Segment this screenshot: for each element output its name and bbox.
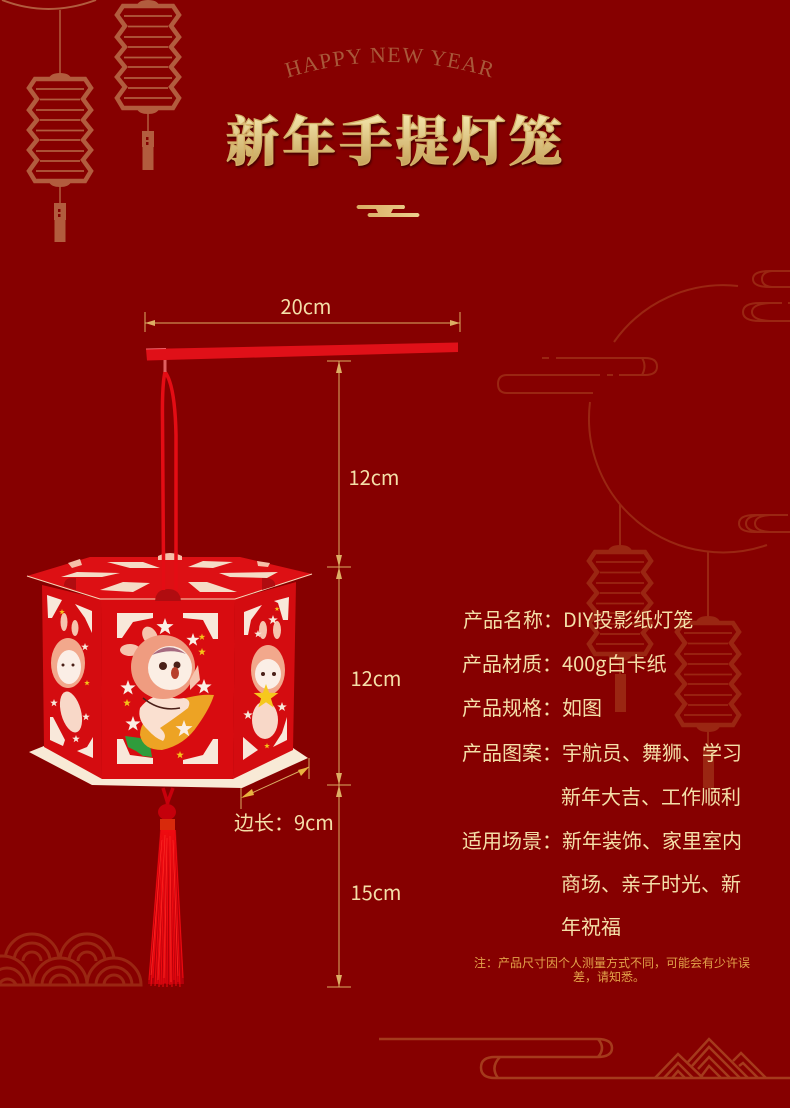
dimension: height column: 12cm — [349, 462, 399, 491]
dimension: side length 9cm — [234, 758, 334, 836]
decoration: bottom right clouds and mountains — [379, 1039, 790, 1078]
lantern top face — [27, 552, 312, 601]
dimension: width 20cm: 20cm — [281, 291, 331, 320]
dimension: side length 9cm: 边长：9cm — [234, 807, 334, 836]
footnote: 注：产品尺寸因个人测量方式不同，可能会有少许误 — [474, 954, 750, 971]
lantern ribbon loop — [162, 372, 176, 566]
footnote: 差，请知悉。 — [573, 968, 645, 985]
paper lantern body — [27, 552, 312, 788]
product specification list: 产品名称：DIY投影纸灯笼 — [463, 604, 693, 633]
product specification list: 产品规格：如图 — [462, 692, 602, 721]
dimension: width 20cm — [145, 291, 460, 332]
dimension: height column — [327, 361, 401, 987]
title ornament — [356, 205, 420, 217]
product specification list: 产品材质：400g白卡纸 — [462, 648, 667, 677]
subtitle: happy new year: HAPPY NEW YEAR — [284, 48, 492, 78]
product specification list: 适用场景：新年装饰、家里室内 — [462, 825, 742, 854]
lantern base — [29, 746, 308, 788]
front face — [101, 599, 235, 779]
right face — [233, 582, 296, 779]
lantern tassel — [148, 788, 184, 987]
product specification list: 商场、亲子时光、新 — [561, 868, 741, 897]
dimension: height column: 12cm — [351, 663, 401, 692]
decoration: top left hanging lanterns — [2, 0, 179, 242]
lantern handle stick — [146, 342, 458, 372]
product specification list: 新年大吉、工作顺利 — [561, 781, 741, 810]
decoration: bottom left wave scallops — [0, 934, 141, 985]
product specification list — [462, 604, 742, 940]
footnote — [474, 954, 750, 985]
title: 新年手提灯笼 — [226, 113, 562, 172]
decoration: right circle, clouds and faint lanterns — [498, 271, 790, 788]
rabbit astronaut on carrot — [120, 618, 214, 758]
left face — [42, 585, 102, 779]
product specification list: 年祝福 — [561, 911, 621, 940]
product specification list: 产品图案：宇航员、舞狮、学习 — [462, 737, 742, 766]
dimension: height column: 15cm — [351, 877, 401, 906]
